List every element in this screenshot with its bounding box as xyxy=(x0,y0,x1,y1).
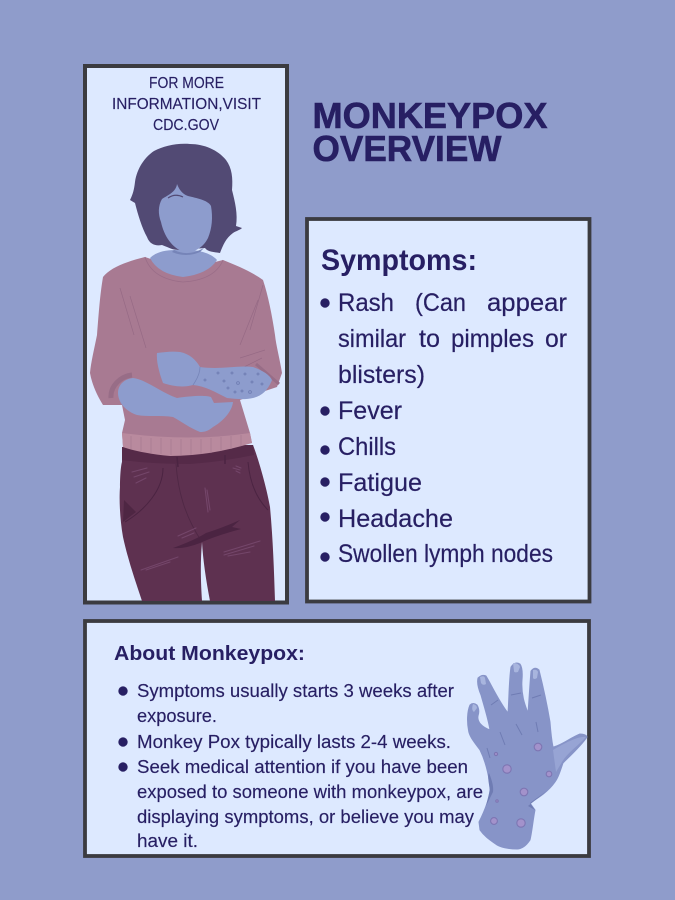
symptoms list: similar xyxy=(338,325,406,353)
about list: displaying symptoms, or believe you may xyxy=(137,807,474,827)
title: OVERVIEW xyxy=(312,128,502,169)
about list xyxy=(118,681,483,851)
lower arm and hand xyxy=(118,378,233,432)
panel: symptoms xyxy=(307,219,590,602)
neck xyxy=(150,250,217,277)
illustration: person with rash on arm xyxy=(90,144,282,601)
symptoms list: to xyxy=(419,325,440,353)
title: MONKEYPOX xyxy=(312,95,548,136)
symptoms list: Fever xyxy=(338,397,402,425)
symptoms list: Rash xyxy=(338,289,394,317)
symptoms list: or xyxy=(545,325,567,353)
hair xyxy=(130,144,242,253)
about list: Monkey Pox typically lasts 2-4 weeks. xyxy=(137,732,451,752)
heading: about monkeypox: About Monkeypox: xyxy=(114,642,305,665)
sweater xyxy=(90,257,282,456)
symptoms list: blisters) xyxy=(338,361,425,389)
upper arm and hand with rash xyxy=(157,352,272,399)
text: more information note: INFORMATION,VISIT xyxy=(112,96,262,113)
symptoms list: (Can xyxy=(415,289,466,317)
text: more information note: FOR MORE xyxy=(149,75,224,92)
face xyxy=(159,184,212,255)
symptoms list: Swollen lymph nodes xyxy=(338,540,553,568)
about list: exposure. xyxy=(137,706,217,726)
icon: hand with pox lesions xyxy=(468,663,587,849)
symptoms list: Chills xyxy=(338,433,396,461)
title xyxy=(312,95,548,169)
symptoms list: appear xyxy=(487,289,567,317)
about list: exposed to someone with monkeypox, are xyxy=(137,782,483,802)
panel: figure with CDC note xyxy=(85,66,287,602)
heading: symptoms: Symptoms: xyxy=(321,244,477,277)
text: more information note: CDC.GOV xyxy=(153,117,220,134)
symptoms list: Headache xyxy=(338,505,453,533)
symptoms list xyxy=(320,289,567,568)
text: more information note xyxy=(112,75,262,134)
about list: Seek medical attention if you have been xyxy=(137,757,468,777)
symptoms list: Fatigue xyxy=(338,469,422,497)
pants xyxy=(120,445,275,601)
about list: have it. xyxy=(137,831,198,851)
about list: Symptoms usually starts 3 weeks after xyxy=(137,681,454,701)
symptoms list: pimples xyxy=(451,325,534,353)
panel: about monkeypox xyxy=(85,621,589,856)
